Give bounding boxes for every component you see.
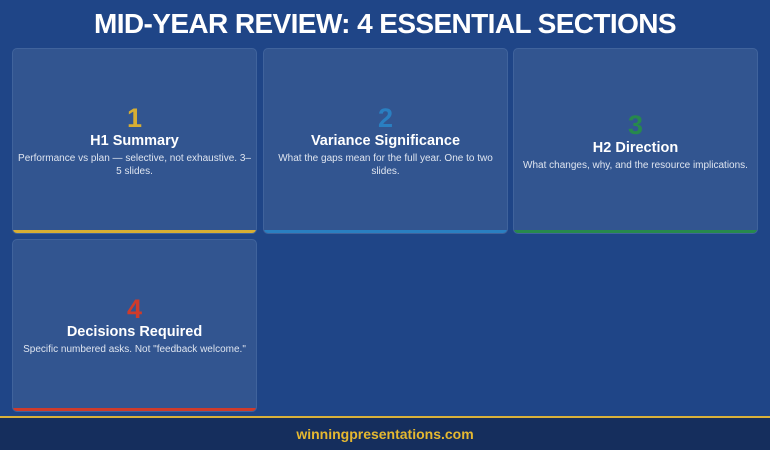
heading: Variance Significance bbox=[311, 133, 460, 149]
number 2: 2 bbox=[378, 103, 393, 133]
number 3: 3 bbox=[628, 110, 643, 140]
description bbox=[18, 153, 251, 177]
heading: Decisions Required bbox=[67, 324, 202, 340]
panel: 4 Decisions Required bbox=[12, 239, 257, 412]
number 1: 1 bbox=[127, 103, 142, 133]
description bbox=[278, 153, 493, 177]
description: What the gaps mean for the full year. One to two bbox=[278, 153, 493, 164]
description: Performance vs plan — selective, not exhaustive. 3– bbox=[18, 153, 251, 164]
panel: 3 H2 Direction bbox=[513, 48, 758, 234]
heading: H2 Direction bbox=[593, 140, 678, 156]
heading: H1 Summary bbox=[90, 133, 179, 149]
description: Specific numbered asks. Not "feedback welcome." bbox=[23, 344, 246, 355]
description: What changes, why, and the resource implications. bbox=[523, 160, 748, 170]
description: 5 slides. bbox=[116, 166, 153, 177]
panel: 2 Variance Significance bbox=[263, 48, 508, 234]
title: MID-YEAR REVIEW: 4 ESSENTIAL SECTIONS bbox=[94, 8, 676, 39]
description: slides. bbox=[371, 166, 400, 177]
number 4: 4 bbox=[127, 294, 142, 324]
panel: 1 H1 Summary bbox=[12, 48, 257, 234]
footer: winningpresentations.com bbox=[296, 426, 474, 442]
footer bbox=[0, 416, 770, 450]
